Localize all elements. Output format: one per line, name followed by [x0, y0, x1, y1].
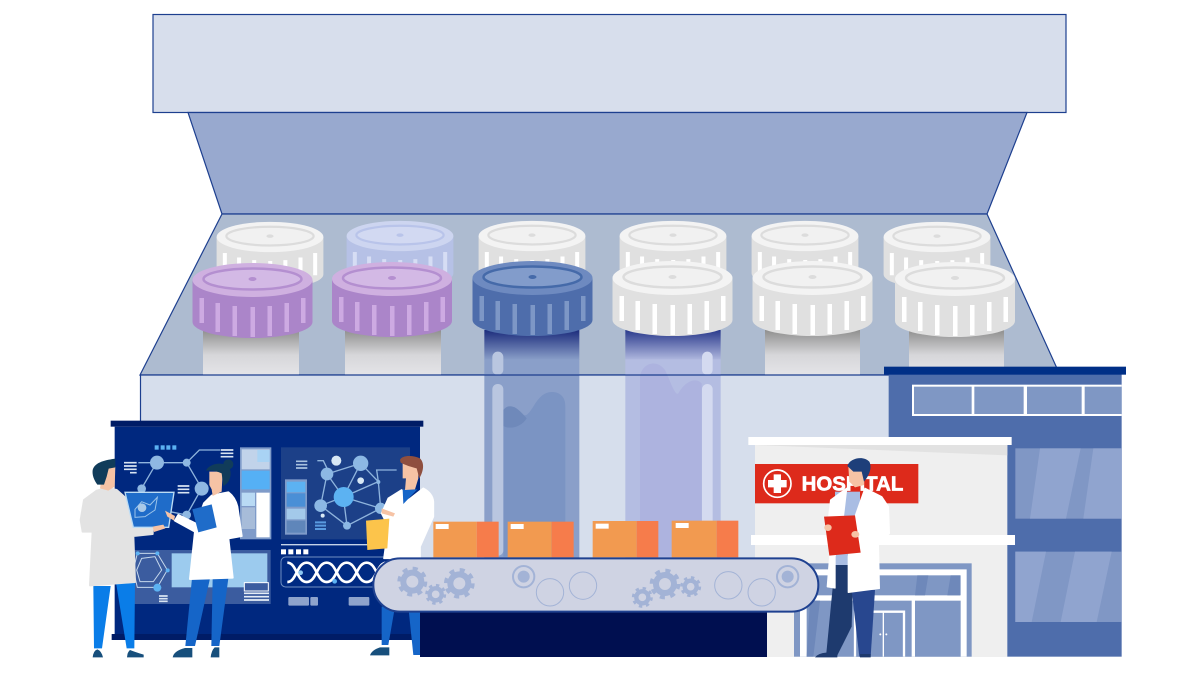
parcel 3: [593, 521, 658, 557]
parcel 1: [433, 522, 499, 557]
DNA panel: [281, 545, 391, 606]
hospital: [748, 367, 1126, 657]
scientist holding tablet: [81, 459, 174, 657]
conveyor belt: [373, 558, 818, 612]
hospital entrance: [794, 563, 972, 657]
conveyor base: [420, 612, 767, 657]
back row of vial caps: [217, 221, 990, 289]
box tray floor: [140, 214, 1060, 375]
molecule panel: [120, 550, 271, 604]
box front wall: [140, 375, 1060, 615]
white hospital building: [748, 437, 1015, 657]
parcels on conveyor belt: [433, 521, 738, 557]
short white vials: [203, 330, 1004, 375]
tall sample vials: [484, 330, 721, 558]
parcel 4: [672, 521, 738, 557]
rollers: [513, 566, 798, 606]
box rear flap: [188, 112, 1027, 214]
hospital sign: HOSPITAL: [802, 473, 903, 496]
lavender vial: [625, 330, 721, 558]
front row of vial caps: [192, 261, 1015, 338]
top left network diagram: [124, 445, 233, 519]
doctor with red clipboard: [815, 458, 889, 657]
scientist with yellow folder: [366, 456, 433, 655]
scientist with blue folder: [165, 459, 242, 657]
gears left: [399, 569, 473, 603]
blue vial: [484, 330, 579, 558]
gears right: [633, 571, 700, 606]
hospital sign: [755, 464, 918, 503]
data column: [240, 447, 271, 539]
blue hospital tower: [884, 367, 1126, 657]
parcel 2: [508, 522, 574, 557]
top right network panel: [281, 447, 410, 539]
laboratory scene: [81, 421, 433, 657]
box lid: [153, 14, 1066, 112]
research display wall: [111, 421, 423, 640]
